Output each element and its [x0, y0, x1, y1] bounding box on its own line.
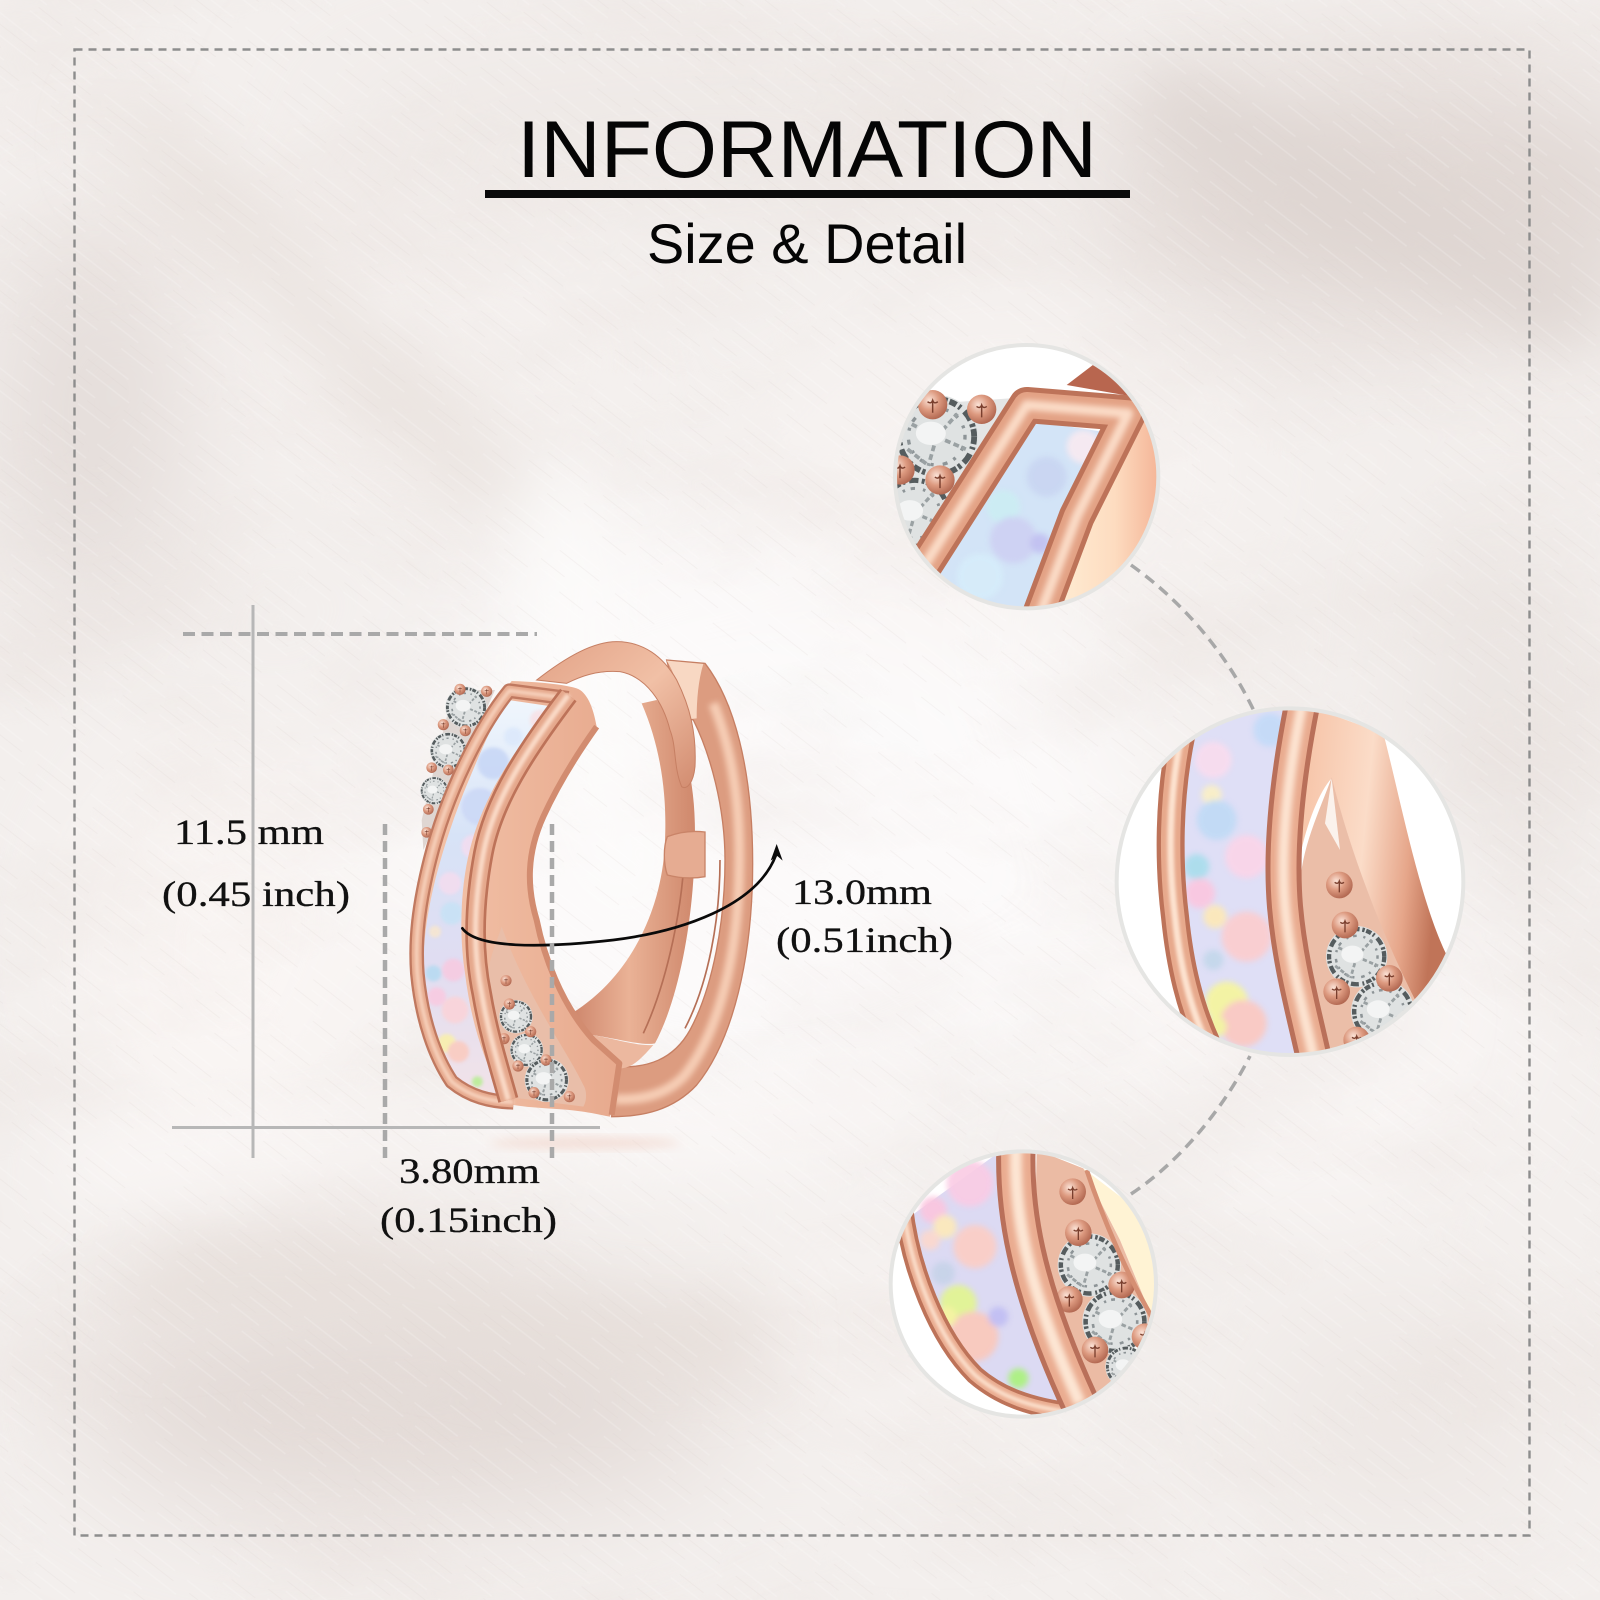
dimension dashed line over earring — [550, 824, 554, 1158]
label: diameter: (0.51inch) — [776, 920, 953, 960]
detail circle: middle — [1114, 706, 1466, 1057]
back hoop band — [612, 660, 753, 1117]
detail circle: top — [893, 343, 1160, 610]
label: diameter — [776, 872, 953, 960]
detail circle: bottom — [880, 1140, 1180, 1440]
earring illustration — [412, 642, 783, 1117]
pave wedge — [488, 927, 586, 1107]
opal — [940, 424, 1100, 606]
peach back surface — [1064, 422, 1156, 601]
label: thickness: 3.80mm — [399, 1151, 540, 1191]
inner hoop shading — [643, 833, 720, 1033]
hinge highlight — [667, 661, 703, 720]
front frame strips — [417, 691, 568, 1102]
peach right band — [1083, 1168, 1167, 1320]
diamonds — [897, 390, 1010, 545]
label: thickness — [380, 1151, 557, 1240]
opal panel — [424, 700, 548, 1094]
reflection below earring — [490, 1137, 680, 1149]
wedge — [1035, 1150, 1158, 1398]
metal strips — [903, 1147, 1152, 1412]
wedge — [1300, 777, 1416, 1067]
title underline — [485, 190, 1130, 198]
subtitle: Size & Detail: Size & Detail — [647, 212, 967, 275]
peach right band — [1300, 703, 1448, 1003]
metal strips — [1171, 703, 1315, 1063]
label: height — [162, 812, 350, 914]
title: INFORMATION: INFORMATION — [517, 105, 1097, 195]
back hoop piece — [1066, 365, 1128, 396]
metal frame — [907, 405, 1128, 623]
label: thickness: (0.15inch) — [380, 1200, 557, 1240]
dashed connector: bottom — [1131, 1056, 1250, 1194]
label: diameter: 13.0mm — [792, 872, 932, 912]
label: height: (0.45 inch) — [162, 874, 350, 914]
dashed connector: top — [1131, 565, 1254, 711]
top pave row — [420, 684, 495, 850]
back hoop highlight — [615, 703, 739, 1099]
rotation arrow — [462, 844, 783, 945]
dimension lines — [172, 605, 600, 1158]
plate inner edge — [530, 727, 619, 1115]
top arc of hoop — [537, 642, 695, 787]
lower hinge — [577, 1033, 653, 1068]
opal — [1184, 710, 1294, 1053]
opal — [910, 1147, 1077, 1410]
stop tab — [664, 831, 705, 878]
front plate — [412, 681, 622, 1117]
label: height: 11.5 mm — [174, 812, 324, 852]
inner hoop band — [563, 700, 695, 1044]
